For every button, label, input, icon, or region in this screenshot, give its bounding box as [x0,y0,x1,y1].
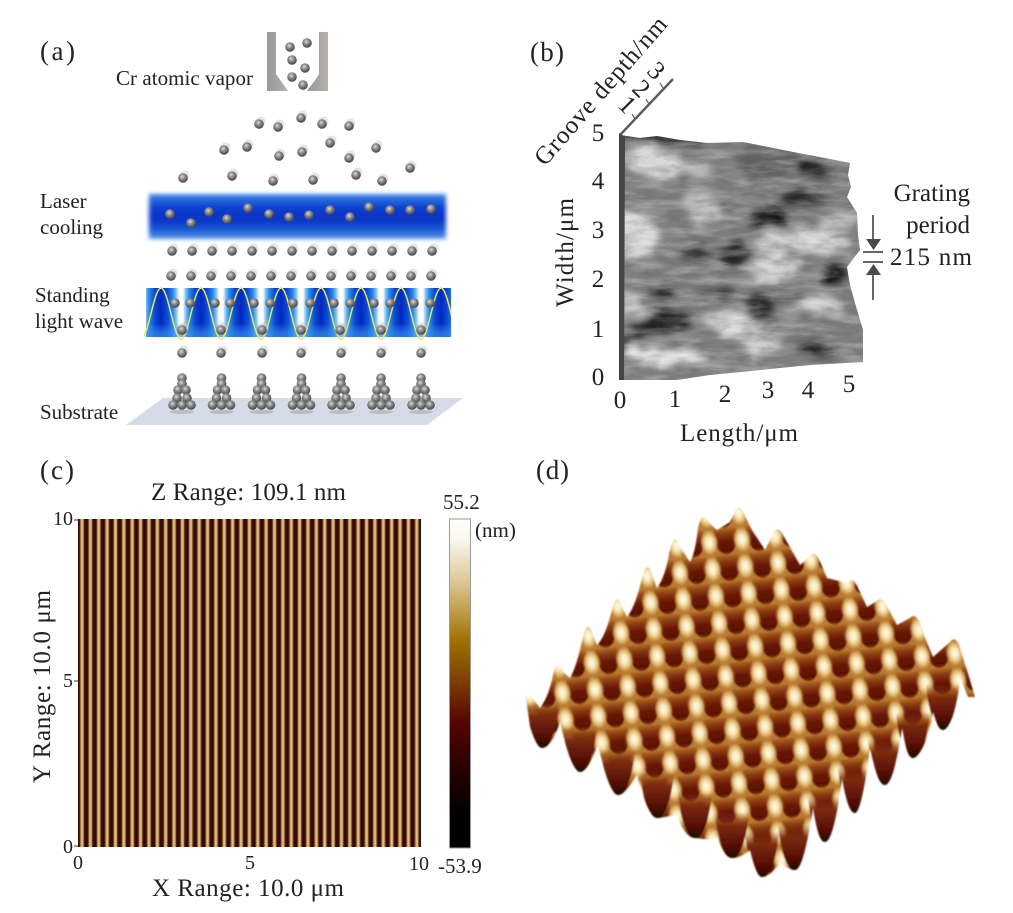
colorbar: (nm) [475,518,516,542]
panel: (c) 1D grating AFM map [29,455,516,902]
icon: vapor nozzle [267,32,328,91]
label: Standing light wave: light wave [35,309,123,333]
label: Cr atomic vapor: Cr atomic vapor [116,66,253,90]
length axis ticks: 2 [719,381,731,408]
grating period callout: period [906,212,970,239]
panel: (a) atom lithography schematic [35,32,463,425]
standing light wave band [141,288,461,339]
width axis ticks: 2 [592,266,604,293]
axis title: X Range: X Range: 10.0 μm [152,875,345,902]
width axis bar [619,133,625,380]
width axis ticks: 1 [592,316,604,343]
grating period callout [890,180,973,271]
length axis ticks [614,371,855,414]
colorbar: 55.2 [443,490,480,514]
atom pyramids on substrate [168,373,435,414]
axis title: Y Range: Y Range: 10.0 μm [29,589,56,783]
laser cooling band [149,194,446,239]
groove depth ticks [613,56,671,119]
width axis ticks: 4 [592,168,605,195]
x axis ticks: 0 [73,852,83,874]
width axis ticks [592,120,605,391]
label (b): (b) [530,37,564,67]
x axis ticks [73,852,429,875]
x axis ticks: 5 [245,852,255,874]
panel: (d) 2D lattice 3D surface [520,455,985,885]
y axis ticks: 5 [63,670,73,692]
width axis ticks: 0 [592,364,604,391]
grating period callout: 215 nm [890,244,973,271]
y axis ticks: 0 [63,836,73,858]
length axis ticks: 5 [843,371,855,398]
atoms: focused row [177,346,428,358]
grating period callout: Grating [894,180,970,207]
3D egg-crate surface [520,500,985,885]
length axis ticks: 0 [614,387,626,414]
atoms: in standing wave [170,298,435,335]
label: Standing light wave [35,283,123,333]
y axis ticks: 10 [53,508,73,530]
label: Laser cooling: Laser [40,189,87,213]
label: Laser cooling [40,189,103,239]
length axis ticks: 3 [762,377,774,404]
label: Laser cooling: cooling [40,215,103,239]
label (d): (d) [536,455,569,485]
groove depth ticks: 1 [613,90,642,119]
label: Standing light wave: Standing [35,283,110,307]
length axis ticks: 4 [802,377,815,404]
axis title: Length/µm: Length/μm [680,420,799,447]
label: Substrate: Substrate [40,400,118,424]
axis title: Groove depth/nm: Groove depth/nm [529,11,673,171]
groove depth axis [620,79,673,135]
x axis ticks: 10 [409,853,429,875]
groove depth ticks: 3 [642,56,671,85]
colorbar: -53.9 [438,854,482,878]
atoms: collimated rows [166,244,438,281]
label (a): (a) [40,36,75,66]
arrows: grating period marker [863,215,883,300]
groove depth ticks: 2 [627,74,656,103]
substrate plate [126,398,463,425]
width axis ticks: 3 [592,217,604,244]
label (c): (c) [40,455,74,485]
axis title: Width/µm: Width/μm [552,197,579,307]
length axis ticks: 1 [669,386,681,413]
stripe map [78,519,421,847]
panel: (b) grating surface AFM [529,11,973,447]
colorbar [438,490,516,878]
y axis ticks [53,508,78,858]
heading: Z Range: Z Range: 109.1 nm [151,479,347,506]
width axis ticks: 5 [592,120,604,147]
atoms: in laser band [165,202,436,228]
atoms: diverging beam [178,110,416,186]
AFM surface image [622,135,863,380]
